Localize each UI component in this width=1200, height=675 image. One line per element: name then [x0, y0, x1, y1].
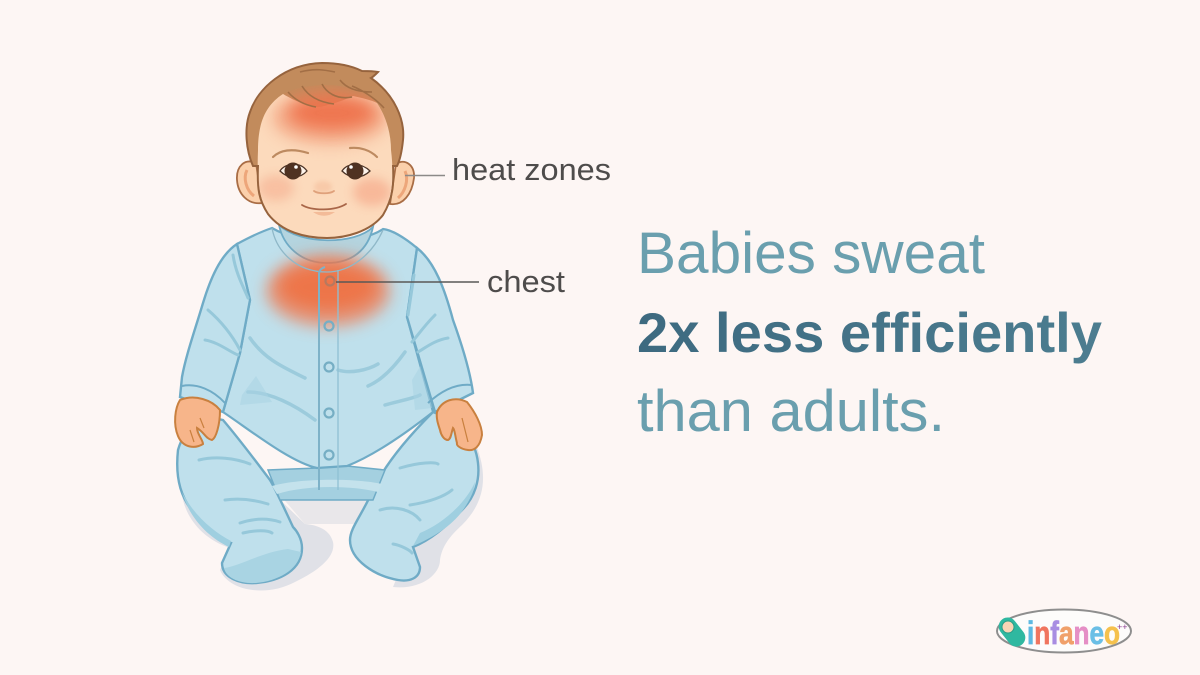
callout: chest: chest: [487, 264, 565, 299]
logo: infaneo: [995, 610, 1131, 652]
headline: [637, 221, 1102, 444]
heat zone: chest: [266, 255, 390, 327]
mouth: [302, 204, 346, 216]
crotch fold: [268, 466, 385, 500]
headline: Babies sweat: [637, 221, 985, 286]
left eye: [280, 162, 307, 180]
eyebrows: [273, 148, 377, 157]
right hand: [437, 399, 482, 450]
headline: 2x less efficiently: [637, 301, 1102, 364]
logo: infaneo: infaneo: [1027, 615, 1120, 651]
hair: [246, 63, 403, 166]
face: [258, 70, 393, 238]
callout: heat zones: heat zones: [452, 152, 611, 187]
torso: [223, 228, 433, 468]
ground shadow: [182, 445, 483, 591]
headline: than adults.: [637, 379, 945, 444]
right arm: [407, 248, 473, 412]
left ear: [237, 162, 262, 203]
heat zone: forehead: [272, 92, 388, 144]
cheeks: [258, 175, 391, 206]
left leg: [177, 419, 302, 583]
right ear: [390, 162, 414, 204]
right eye: [342, 162, 370, 180]
placket and buttons: [272, 228, 383, 490]
left hand: [175, 398, 220, 447]
nose: [314, 181, 334, 193]
icon: swaddled baby: [995, 614, 1029, 650]
collar: [279, 225, 373, 263]
logo: infaneo: ++: [1117, 622, 1128, 632]
left arm: [180, 244, 250, 412]
illustration: baby in blue sleepsuit: [175, 63, 483, 591]
fringe strands: [288, 70, 384, 108]
right leg: [350, 412, 478, 580]
